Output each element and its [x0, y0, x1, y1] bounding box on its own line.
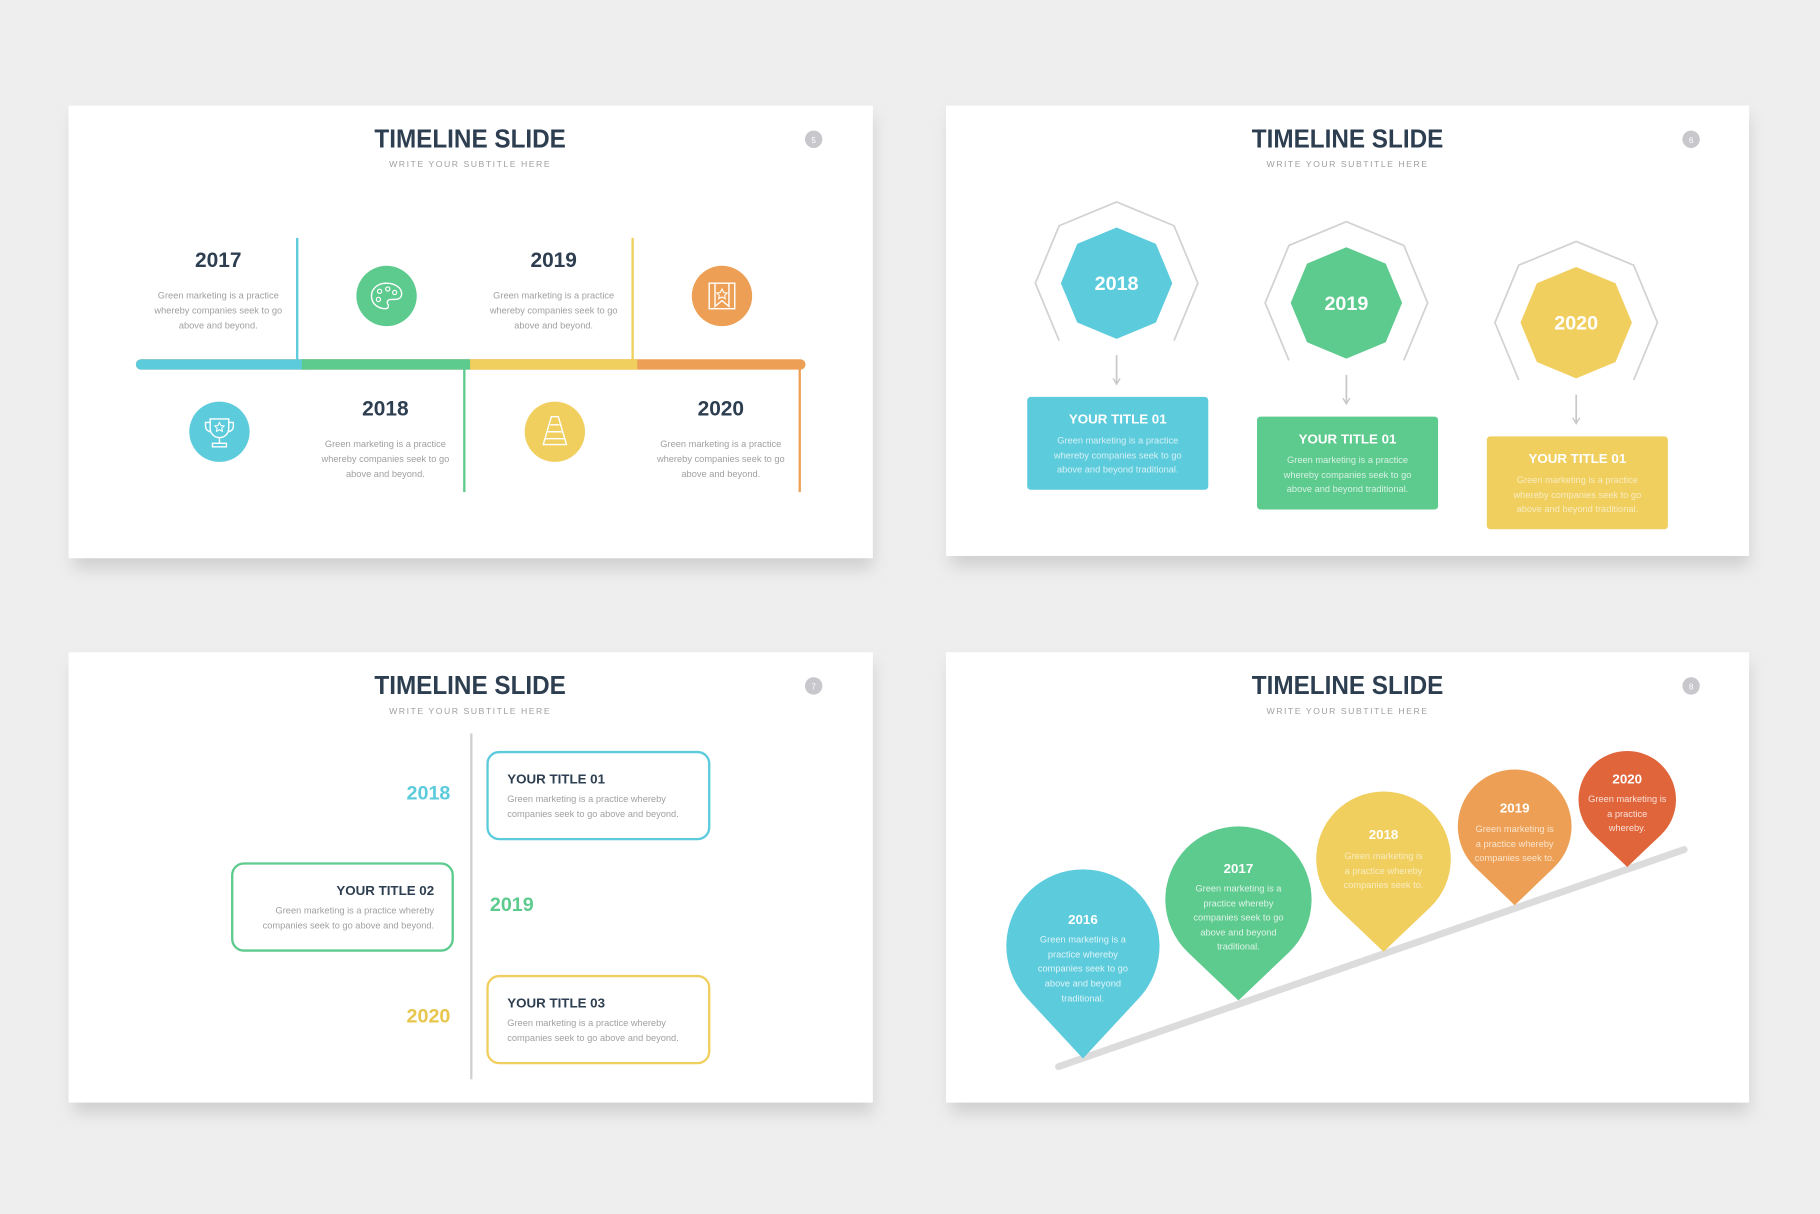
- panel: slide 4 pin timeline: [946, 652, 1749, 1113]
- pin: 2017: [1165, 826, 1312, 1000]
- pin: 2018: Green marketing is: [1344, 851, 1423, 861]
- pin: 2017: companies seek to go: [1193, 912, 1284, 922]
- text block: 2018: [321, 397, 449, 479]
- text block: 2020: 2020: [698, 397, 744, 420]
- icon: trophy: [189, 402, 250, 462]
- page number badge: 7: [811, 682, 816, 691]
- step: 2018 octagon: above and beyond traditional.: [1057, 464, 1179, 474]
- card: title 01: Green marketing is a practice whereby: [507, 794, 666, 804]
- text block: 2017: above and beyond.: [179, 320, 258, 330]
- card: title 03: [488, 976, 709, 1063]
- text block: 2019: above and beyond.: [514, 320, 593, 330]
- heading: slide 4 title: TIMELINE SLIDE: [1252, 672, 1443, 700]
- pin: 2019: companies seek to.: [1475, 853, 1555, 863]
- pin: 2020: [1579, 751, 1676, 867]
- pin: 2018: a practice whereby: [1345, 866, 1423, 876]
- heading: slide 2 title: [1252, 125, 1443, 169]
- text block: 2019: 2019: [530, 249, 577, 272]
- step: 2019 octagon: whereby companies seek to go: [1283, 470, 1411, 480]
- step: 2019 octagon: YOUR TITLE 01: [1299, 431, 1397, 446]
- text block: 2020: Green marketing is a practice: [660, 439, 781, 449]
- heading: slide 4 title: WRITE YOUR SUBTITLE HERE: [1267, 706, 1429, 716]
- text block: 2019: Green marketing is a practice: [493, 290, 614, 300]
- text block: 2017: [153, 249, 282, 330]
- icon: bookmark star: [692, 266, 752, 326]
- step: 2019 octagon: 2019: [1324, 293, 1368, 315]
- pin: 2016: Green marketing is a: [1040, 934, 1127, 944]
- step: 2020 octagon: above and beyond traditional.: [1517, 504, 1638, 514]
- pin: 2017: practice whereby: [1203, 898, 1274, 908]
- year labels: 2019: [490, 894, 534, 916]
- card: title 03: companies seek to go above and beyond.: [507, 1033, 679, 1043]
- heading: slide 1 title: WRITE YOUR SUBTITLE HERE: [389, 159, 551, 169]
- step: 2018 octagon: Green marketing is a practice: [1057, 435, 1178, 445]
- pin: 2016: 2016: [1068, 912, 1098, 927]
- step: 2019 octagon: above and beyond traditional.: [1287, 484, 1408, 494]
- step: 2020 octagon: whereby companies seek to go: [1512, 490, 1641, 500]
- pin: 2019: Green marketing is: [1476, 824, 1554, 834]
- icon: palette: [356, 266, 417, 326]
- text block: 2018: whereby companies seek to go: [321, 454, 449, 464]
- step: 2020 octagon: YOUR TITLE 01: [1528, 451, 1627, 466]
- page number badge: [805, 677, 822, 695]
- pin: 2018: companies seek to.: [1344, 880, 1423, 890]
- heading: slide 2 title: TIMELINE SLIDE: [1252, 125, 1443, 153]
- year labels: 2020: [407, 1005, 450, 1027]
- pin: 2016: [1006, 869, 1160, 1058]
- timeline bar: [136, 238, 806, 492]
- pin: 2020: whereby.: [1608, 823, 1646, 833]
- page number badge: [1682, 131, 1700, 148]
- pin: 2016: companies seek to go: [1038, 963, 1128, 973]
- panel: slide 2 octagon timeline: [946, 106, 1749, 566]
- page number badge: [805, 131, 822, 148]
- heading: slide 3 title: TIMELINE SLIDE: [374, 672, 566, 700]
- pin: 2017: above and beyond: [1200, 927, 1277, 937]
- step: 2018 octagon: YOUR TITLE 01: [1069, 412, 1167, 427]
- pin: 2020: 2020: [1612, 771, 1642, 786]
- step: 2018 octagon: whereby companies seek to go: [1053, 450, 1182, 460]
- step: 2018 octagon: 2018: [1095, 273, 1139, 295]
- heading: slide 3 title: WRITE YOUR SUBTITLE HERE: [389, 706, 551, 716]
- text block: 2019: [489, 249, 618, 330]
- rising line: [1059, 850, 1684, 1067]
- text block: 2019: whereby companies seek to go: [489, 305, 618, 315]
- text block: 2018: Green marketing is a practice: [325, 439, 446, 449]
- step: 2019 octagon: [1257, 222, 1438, 510]
- panel: slide 1 horizontal timeline: [69, 106, 873, 569]
- page number badge: 6: [1689, 136, 1694, 145]
- page number badge: 5: [811, 136, 816, 145]
- page number badge: 8: [1689, 682, 1694, 691]
- pin: 2019: a practice whereby: [1476, 839, 1554, 849]
- card: title 02: [232, 863, 453, 951]
- step: 2020 octagon: 2020: [1554, 313, 1598, 335]
- heading: slide 4 title: [1252, 672, 1443, 716]
- pin: 2019: [1458, 770, 1572, 905]
- year labels: 2018: [407, 783, 450, 805]
- card: title 01: [488, 752, 709, 839]
- heading: slide 1 title: [374, 125, 566, 169]
- heading: slide 3 title: [374, 672, 566, 716]
- pin: 2016: practice whereby: [1048, 950, 1118, 960]
- pin: 2016: traditional.: [1062, 994, 1104, 1004]
- pin: 2017: 2017: [1224, 861, 1253, 876]
- year labels: [407, 783, 534, 1027]
- pin: 2017: traditional.: [1217, 941, 1260, 951]
- pin: 2019: 2019: [1500, 800, 1530, 815]
- pin: 2017: Green marketing is a: [1195, 883, 1282, 893]
- text block: 2020: whereby companies seek to go: [656, 454, 785, 464]
- text block: 2017: Green marketing is a practice: [158, 290, 279, 300]
- card: title 02: Green marketing is a practice whereby: [276, 905, 435, 915]
- pin: 2018: 2018: [1369, 827, 1398, 842]
- page number badge: [1682, 677, 1700, 695]
- text block: 2017: 2017: [195, 249, 242, 272]
- icon: traffic cone: [525, 402, 585, 462]
- step: 2020 octagon: Green marketing is a practice: [1517, 475, 1638, 485]
- heading: slide 2 title: WRITE YOUR SUBTITLE HERE: [1267, 159, 1429, 169]
- text block: 2020: [656, 397, 785, 479]
- card: title 02: companies seek to go above and beyond.: [263, 920, 434, 930]
- panel: slide 3 vertical timeline: [69, 652, 873, 1113]
- card: title 03: Green marketing is a practice whereby: [507, 1018, 666, 1028]
- step: 2020 octagon: [1487, 241, 1668, 529]
- text block: 2020: above and beyond.: [681, 469, 760, 479]
- pin: 2018: [1316, 792, 1451, 952]
- step: 2018 octagon: [1027, 202, 1208, 490]
- pin: 2016: above and beyond: [1045, 979, 1121, 989]
- card: title 03: YOUR TITLE 03: [507, 995, 605, 1010]
- heading: slide 1 title: TIMELINE SLIDE: [374, 125, 566, 153]
- step: 2019 octagon: Green marketing is a practice: [1287, 455, 1408, 465]
- pin: 2020: a practice: [1607, 809, 1647, 819]
- text block: 2018: 2018: [362, 397, 409, 420]
- text block: 2017: whereby companies seek to go: [153, 305, 282, 315]
- text block: 2018: above and beyond.: [346, 469, 425, 479]
- card: title 02: YOUR TITLE 02: [336, 883, 434, 898]
- pin: 2020: Green marketing is: [1588, 794, 1667, 804]
- card: title 01: YOUR TITLE 01: [507, 771, 606, 786]
- card: title 01: companies seek to go above and beyond.: [507, 809, 679, 819]
